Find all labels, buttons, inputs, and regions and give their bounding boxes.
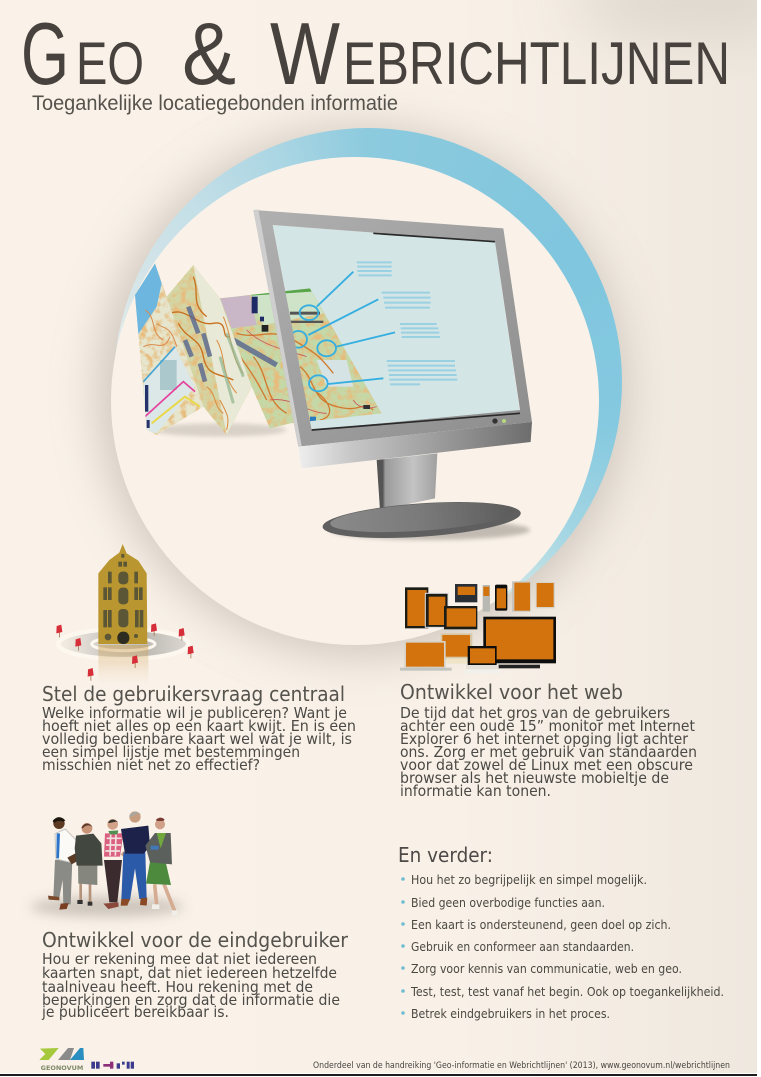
text block: gebruikersvraag: volledig bedienbare kaart wel wat je wilt, is [42, 730, 352, 748]
text block: eindgebruiker: kaarten snapt, dat niet iedereen hetzelfde [42, 964, 337, 982]
bullet list [401, 873, 724, 1021]
monitor screen [273, 225, 520, 430]
logo: Geonovum [39, 1048, 84, 1072]
folded map [130, 260, 387, 440]
monitor buttons [492, 418, 506, 424]
heading: Ontwikkel voor de eindgebruiker: Ontwikkel voor de eindgebruiker [42, 928, 349, 952]
ground shadow [30, 897, 183, 917]
text block: eindgebruiker: beperkingen en zorg dat de informatie die [42, 991, 340, 1009]
rings [58, 629, 188, 659]
cream inner circle [111, 157, 599, 645]
text block: gebruikersvraag: een simpel lijstje met bestemmingen [42, 743, 300, 761]
text block: eindgebruiker: taalniveau heeft. Hou rekening met de [42, 978, 313, 996]
text block: web: voor dat zowel de Linux met een obscure [400, 756, 693, 774]
person: woman in green skirt [145, 818, 177, 915]
bottom edge line [0, 1074, 757, 1076]
text block: web [400, 704, 697, 800]
blue ring [114, 128, 622, 636]
monitor base [321, 496, 522, 544]
monitor stand neck [377, 453, 437, 510]
text block: eindgebruiker: je publiceert bereikbaar is. [41, 1003, 229, 1021]
person: man with tie [48, 817, 84, 910]
map panel left [135, 264, 203, 435]
text block: web: informatie kan tonen. [400, 782, 551, 800]
heading: En verder: En verder: [398, 843, 493, 867]
logo: Geonovum: GEONOVUM [41, 1065, 83, 1072]
icon: house with flags [56, 544, 194, 685]
person: woman in pink top [103, 819, 131, 909]
text block: eindgebruiker [41, 950, 340, 1021]
text block: gebruikersvraag [42, 704, 356, 774]
bullet list: Gebruik en conformeer aan standaarden. [411, 940, 634, 954]
text block: gebruikersvraag: misschien niet net zo effectief? [42, 756, 260, 774]
text block: gebruikersvraag: Welke informatie wil je publiceren? Want je [42, 704, 347, 722]
map panel right [217, 287, 387, 430]
title: EO [76, 30, 144, 97]
callout text lines [357, 262, 457, 384]
monitor inner lines [312, 233, 520, 430]
text block: web: Explorer 6 het internet opging ligt achter [400, 730, 689, 748]
icon: group of people [30, 811, 183, 917]
text block: web: browser als het nieuwste mobieltje de [400, 769, 669, 787]
monitor base shadow [330, 520, 530, 540]
top right corner shading [570, 0, 761, 36]
icon: devices [400, 581, 556, 674]
logo: partner marks [91, 1062, 134, 1069]
bullet list: Bied geen overbodige functies aan. [411, 896, 605, 910]
text block: web: ons. Zorg er met gebruik van standaarden [400, 743, 697, 761]
text block: web: achter een oude 15” monitor met Internet [400, 717, 695, 735]
heading: Stel de gebruikersvraag centraal: Stel de gebruikersvraag centraal [42, 682, 345, 706]
subtitle: Toegankelijke locatiegebonden informatie [32, 92, 398, 115]
flags [56, 623, 194, 681]
house body [98, 544, 147, 644]
title: W [270, 4, 340, 103]
title: & [182, 4, 236, 103]
monitor left edge highlight [253, 209, 302, 447]
bullet list: Een kaart is ondersteunend, geen doel op zich. [411, 918, 671, 932]
bullet list: Hou het zo begrijpelijk en simpel mogelijk. [411, 873, 647, 887]
illustration: map and monitor [130, 209, 532, 544]
text block: eindgebruiker: Hou er rekening mee dat niet iedereen [42, 950, 317, 968]
person: woman in dark jacket [75, 823, 103, 906]
bullet list: Test, test, test vanaf het begin. Ook op toegankelijkheid. [410, 985, 724, 999]
bullet list: Betrek eindgebruikers in het proces. [411, 1007, 610, 1021]
map shadow [153, 423, 287, 437]
house windows [103, 554, 143, 644]
map panel centre [166, 265, 252, 435]
title: G [21, 4, 69, 103]
monitor frame [253, 210, 532, 447]
monitor lower strip [298, 422, 532, 468]
house reflection [98, 645, 148, 685]
text block: web: De tijd dat het gros van de gebruikers [400, 704, 670, 722]
person: man in navy sweater [121, 811, 150, 906]
bullet list: Zorg voor kennis van communicatie, web en geo. [411, 962, 682, 976]
soft circle shadow [100, 130, 624, 654]
text block: gebruikersvraag: hoeft niet alles op een kaart kwijt. En is een [42, 717, 356, 735]
map callouts [290, 272, 395, 391]
footer credit: Onderdeel van de handreiking 'Geo-informatie en Webrichtlijnen' (2013), www.geonovum.nl/webrichtlijnen [313, 1061, 730, 1071]
title [21, 4, 730, 103]
heading: Ontwikkel voor het web: Ontwikkel voor het web [400, 680, 623, 704]
